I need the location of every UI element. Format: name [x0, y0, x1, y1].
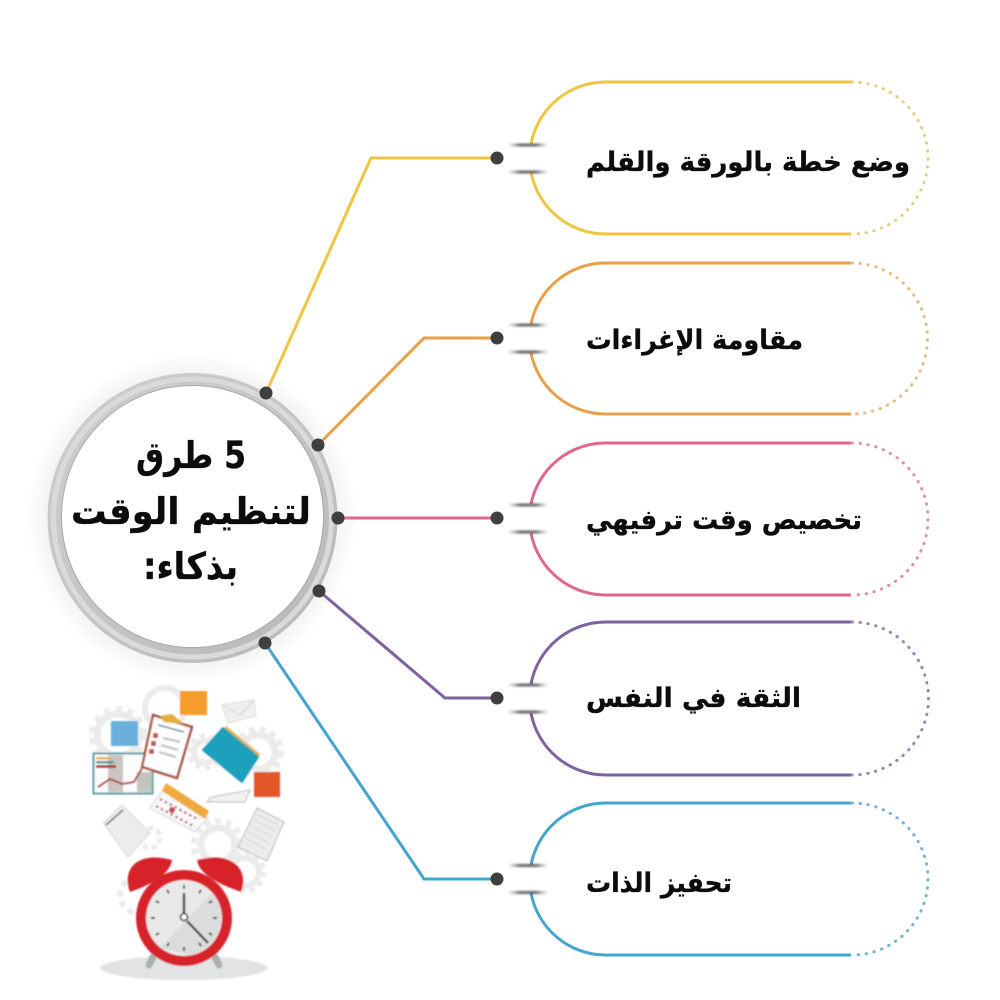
text: item 5: تحفيز الذات [586, 868, 732, 899]
icon: envelope [222, 700, 256, 723]
title: 5 طرق [136, 434, 246, 477]
icon: blue note [111, 721, 138, 746]
icon: small paper [207, 790, 250, 802]
icon: alarm clock [100, 858, 268, 980]
connector: orange [318, 338, 497, 445]
panel: item 3 [490, 443, 928, 595]
connector: pink [338, 516, 497, 520]
panel: item 4 [490, 622, 928, 775]
icon: calendar [150, 783, 209, 832]
connector: purple [319, 591, 497, 698]
text: item 1: وضع خطة بالورقة والقلم [586, 147, 910, 178]
icon: teal folder [203, 726, 260, 782]
panel: item 5 [490, 803, 928, 955]
title [71, 434, 311, 588]
panel: item 2 [490, 263, 928, 414]
icon: clipboard [142, 714, 192, 778]
title: بذكاء: [143, 545, 238, 588]
icon: chart [94, 754, 152, 794]
text: item 2: مقاومة الإغراءات [586, 325, 803, 356]
icon: left document [103, 805, 150, 857]
connector: yellow [266, 158, 497, 393]
icon: background gears [92, 688, 281, 913]
panel: item 1 [490, 82, 928, 234]
icon: right paper [238, 808, 284, 861]
central circle panel [27, 353, 357, 683]
ring connector dots [258, 386, 344, 650]
icon: orange note [180, 691, 207, 715]
illustration: alarm clock with office items [92, 688, 284, 980]
text: item 4: الثقة في النفس [586, 683, 801, 714]
title: لتنظيم الوقت [71, 490, 311, 533]
connector: blue [265, 643, 497, 879]
text: item 3: تخصيص وقت ترفيهي [586, 505, 862, 536]
icon: red note [254, 772, 280, 797]
